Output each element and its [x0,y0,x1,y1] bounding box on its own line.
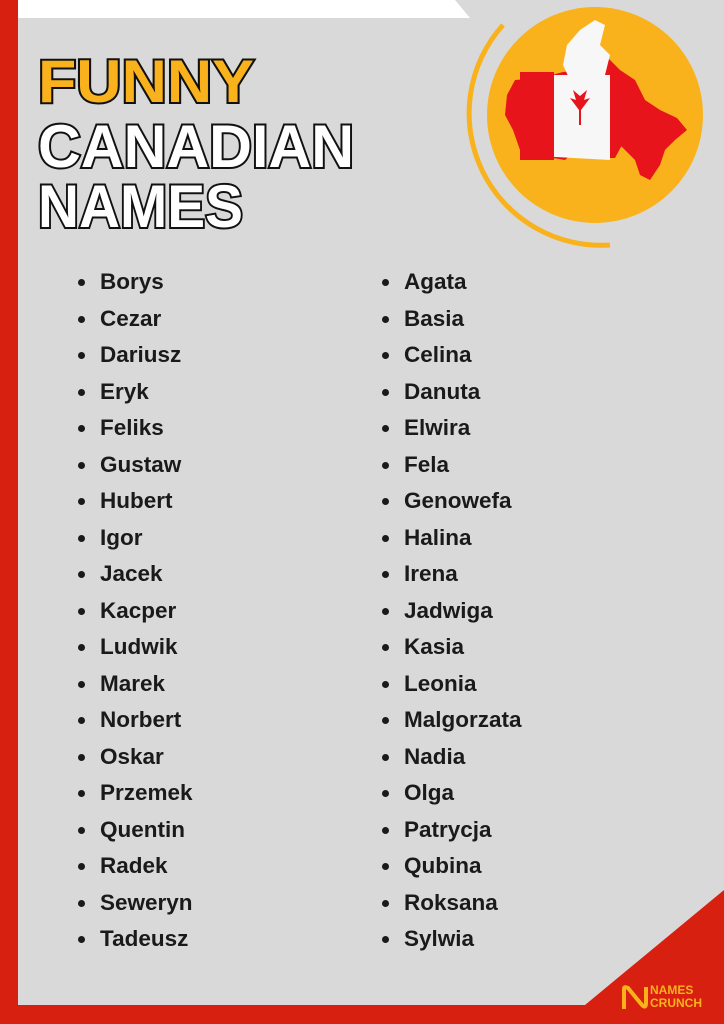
names column 1: Seweryn [100,890,193,914]
names column 2: Roksana [404,890,498,914]
names column 2: Elwira [404,415,470,440]
names column 2: Genowefa [404,488,512,513]
names column 1: Norbert [100,707,181,732]
names column 1: Radek [100,853,168,878]
names column 2: Olga [404,780,454,805]
names column 2: Celina [404,342,472,367]
icon: canada map circle [466,7,703,248]
names column 1: Gustaw [100,452,181,476]
names column 1: Cezar [100,306,161,330]
names column 1: Dariusz [100,342,181,367]
title: NAMES [38,173,243,240]
names column 1: Oskar [100,744,164,768]
names column 2: Fela [404,452,449,476]
names column 2: Qubina [404,853,482,878]
names column 1: Borys [100,269,164,294]
names column 2: Irena [404,561,458,586]
logo [622,983,702,1010]
names column 1: Tadeusz [100,926,188,951]
names column 1: Przemek [100,780,193,805]
title: CANADIAN [38,113,354,180]
names column 2: Jadwiga [404,598,493,622]
names column 2: Agata [404,269,467,294]
names column 2: Sylwia [404,926,474,951]
names column 1: Jacek [100,561,163,586]
names column 1: Marek [100,670,165,696]
names column 2: Halina [404,524,472,550]
names column 2 [382,269,522,951]
names column 1: Quentin [100,816,185,842]
names column 1 [78,269,193,951]
names column 1: Ludwik [100,634,178,659]
title [38,48,354,240]
names column 2: Basia [404,306,464,330]
names column 1: Eryk [100,378,149,404]
names column 2: Patrycja [404,816,492,842]
names column 2: Danuta [404,378,480,404]
names column 2: Kasia [404,634,464,659]
names column 2: Nadia [404,744,465,768]
logo: CRUNCH [650,996,702,1010]
names column 1: Hubert [100,488,172,513]
names column 2: Malgorzata [404,707,522,732]
names column 1: Kacper [100,598,176,622]
names column 2: Leonia [404,670,477,696]
title: FUNNY [38,48,254,115]
names column 1: Igor [100,524,142,550]
names column 1: Feliks [100,415,164,440]
logo: NAMES [650,983,693,997]
